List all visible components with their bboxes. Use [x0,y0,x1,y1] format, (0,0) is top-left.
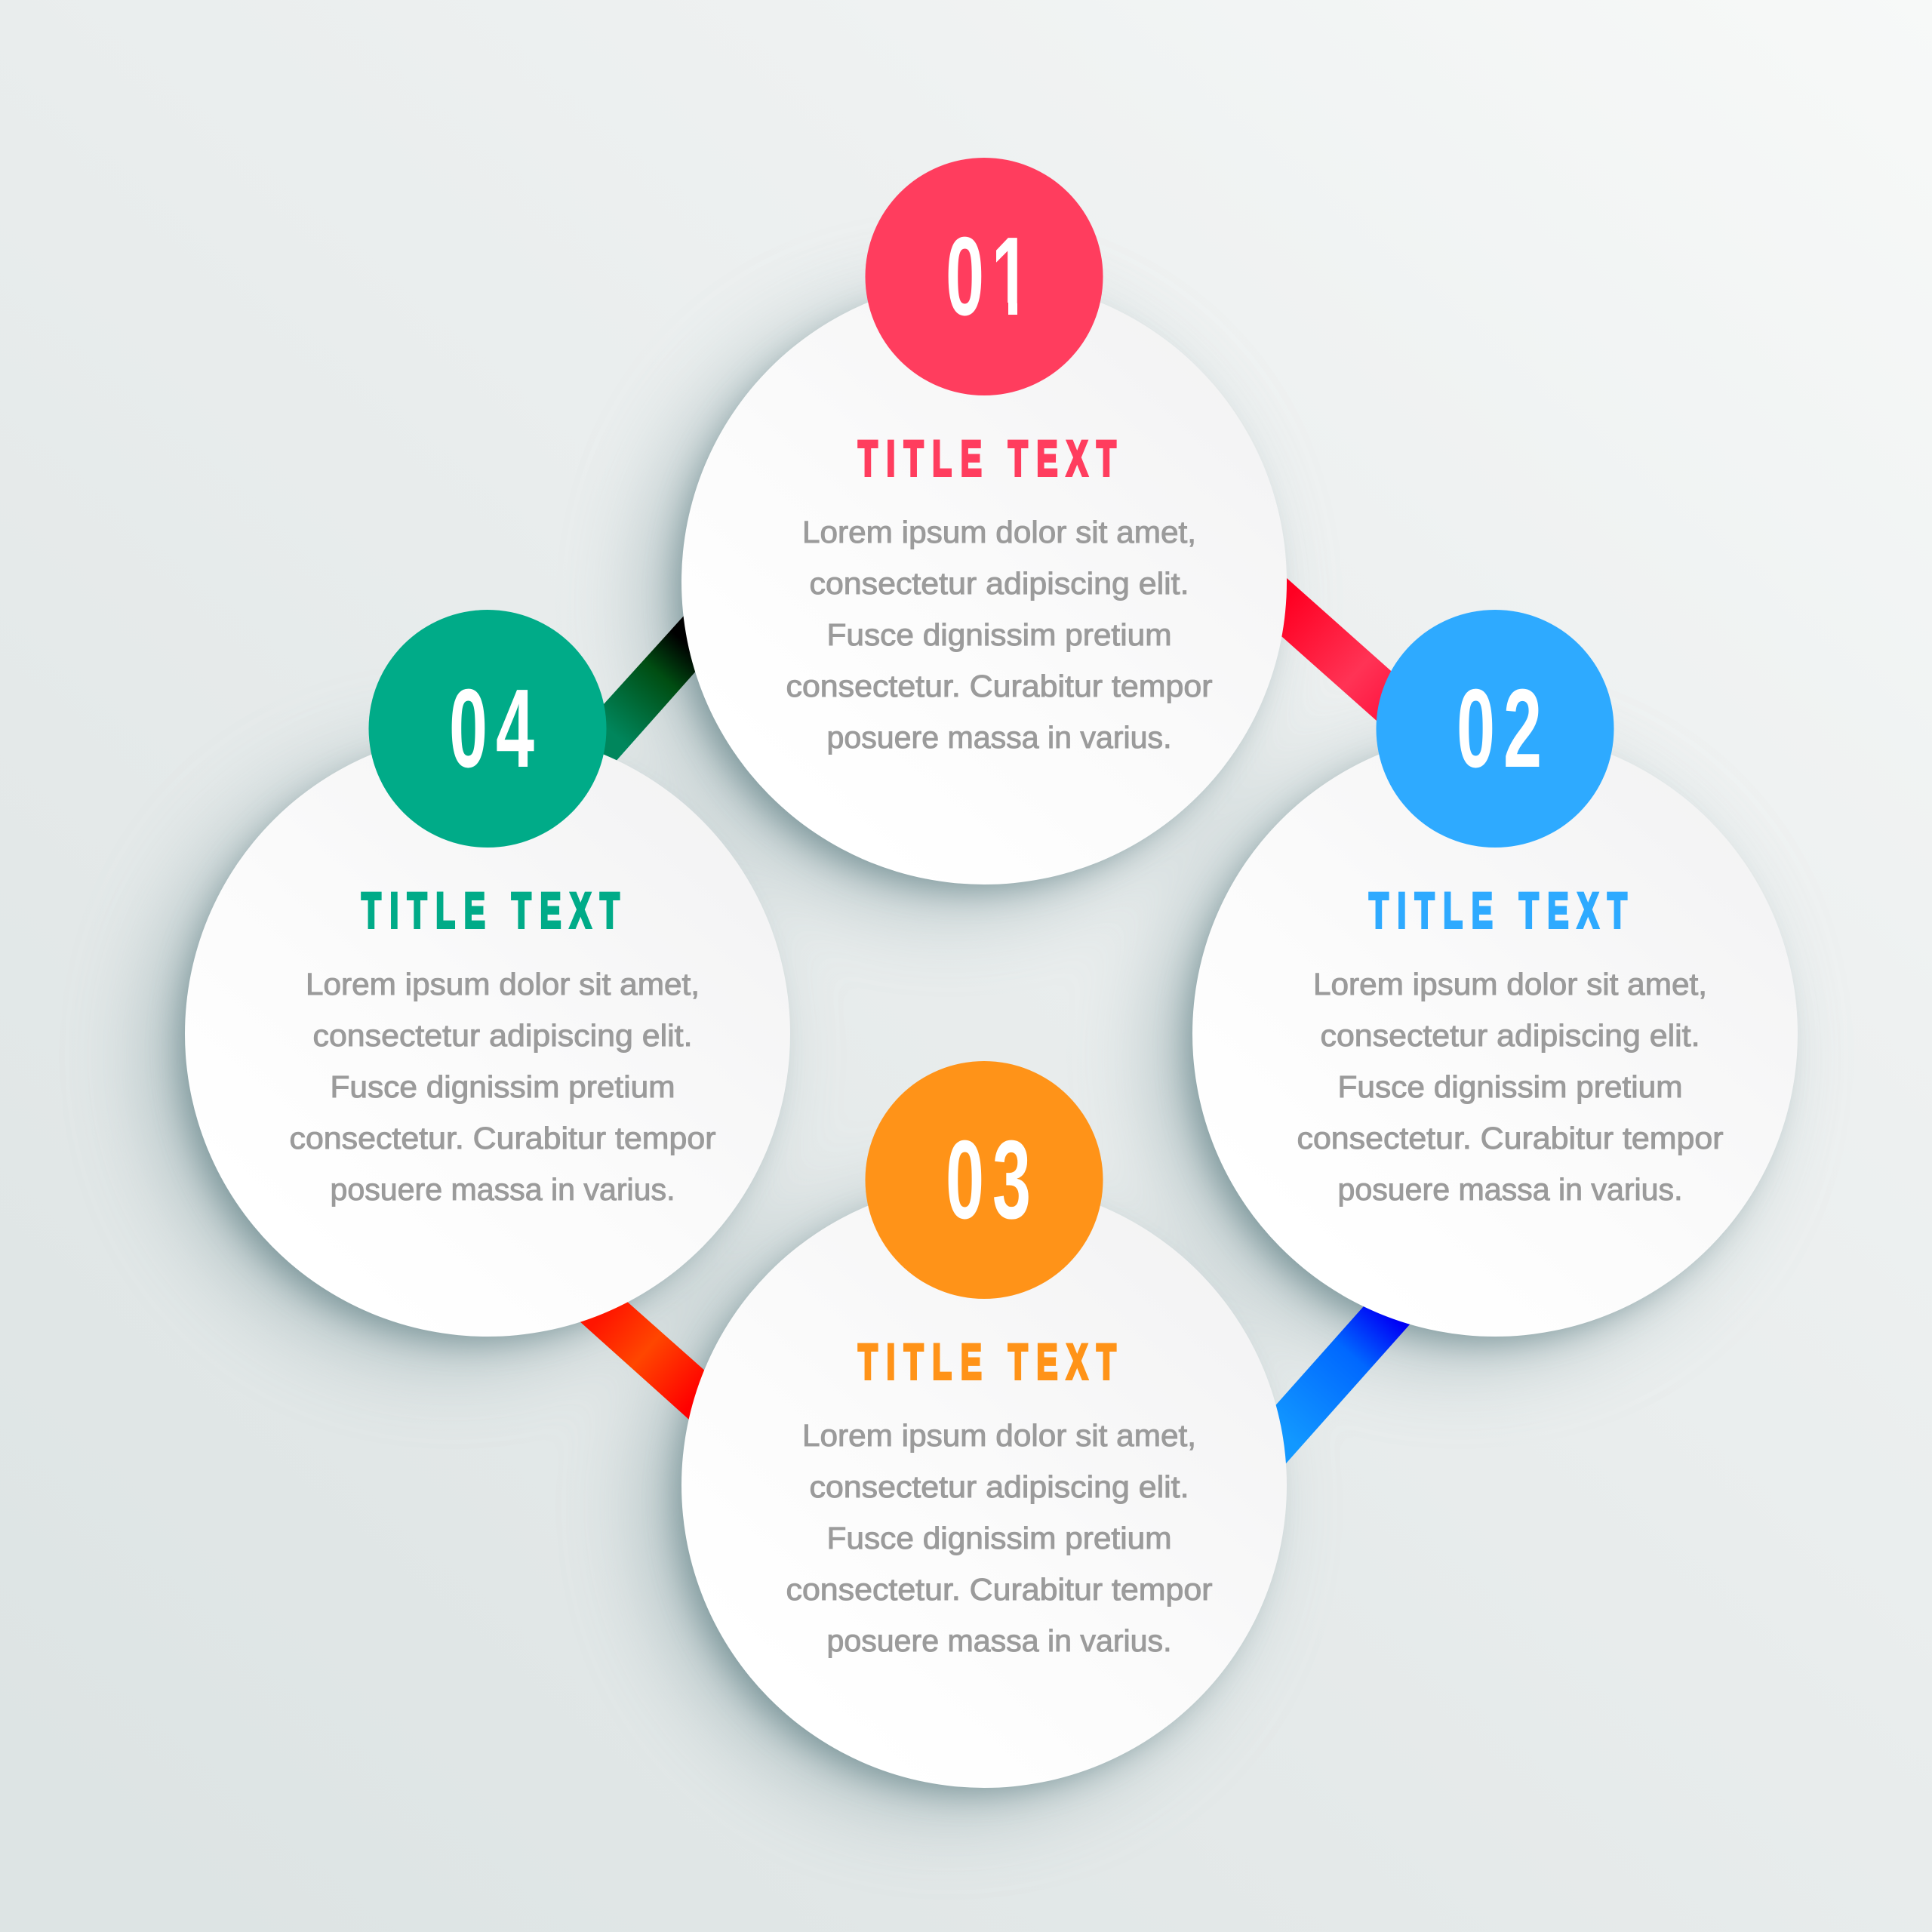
number badge 04 [368,610,607,848]
number badge 04: 04 [449,667,534,791]
body text 04 [290,967,715,1207]
connector: step 2 to step 3 [1259,1287,1428,1483]
panel: step 04 [185,610,790,1337]
body text 01 [786,515,1212,755]
title 03: TITLE TEXT [858,1334,1116,1389]
number badge 02: 02 [1457,667,1542,791]
number badge 02 [1377,610,1614,848]
number badge 01 [865,158,1103,395]
body text 03: consectetur. Curabitur tempor [786,1572,1212,1607]
body text 04: posuere massa in varius. [331,1172,675,1207]
body text 04: Lorem ipsum dolor sit amet, [306,967,700,1001]
body text 02: posuere massa in varius. [1337,1172,1683,1207]
body text 01: consectetur. Curabitur tempor [786,669,1212,703]
body text 02: consectetur adipiscing elit. [1321,1018,1700,1053]
body text 02: Fusce dignissim pretium [1337,1069,1683,1104]
body text 01: posuere massa in varius. [827,720,1171,755]
connector: step 1 to step 2 [1262,560,1411,739]
body text 03: Lorem ipsum dolor sit amet, [802,1418,1196,1453]
body text 04: consectetur adipiscing elit. [312,1018,693,1053]
body text 03 [786,1418,1212,1658]
body text 04: Fusce dignissim pretium [331,1069,675,1104]
body text 01: Fusce dignissim pretium [827,617,1171,652]
number badge 03 [865,1061,1103,1299]
body text 01: Lorem ipsum dolor sit amet, [802,515,1196,549]
panel: step 03 [681,1061,1287,1788]
body text 02 [1297,967,1724,1207]
panel: step 02 [1192,610,1798,1337]
connector: step 4 to step 1 [589,599,710,777]
number badge 01: 01 [946,215,1030,339]
title 02: TITLE TEXT [1369,882,1627,938]
title 01: TITLE TEXT [858,430,1116,486]
number badge 03: 03 [946,1118,1031,1242]
body text 04: consectetur. Curabitur tempor [290,1121,715,1155]
body text 03: Fusce dignissim pretium [827,1521,1171,1555]
soft shadows behind the discs [157,303,1774,1802]
title 04: TITLE TEXT [361,882,620,938]
body text 01: consectetur adipiscing elit. [809,566,1189,601]
panel: step 01 [681,158,1287,884]
body text 03: consectetur adipiscing elit. [809,1469,1189,1504]
connector: step 3 to step 4 [565,1288,719,1433]
body text 02: Lorem ipsum dolor sit amet, [1313,967,1707,1001]
body text 03: posuere massa in varius. [827,1623,1171,1658]
body text 02: consectetur. Curabitur tempor [1297,1121,1724,1155]
